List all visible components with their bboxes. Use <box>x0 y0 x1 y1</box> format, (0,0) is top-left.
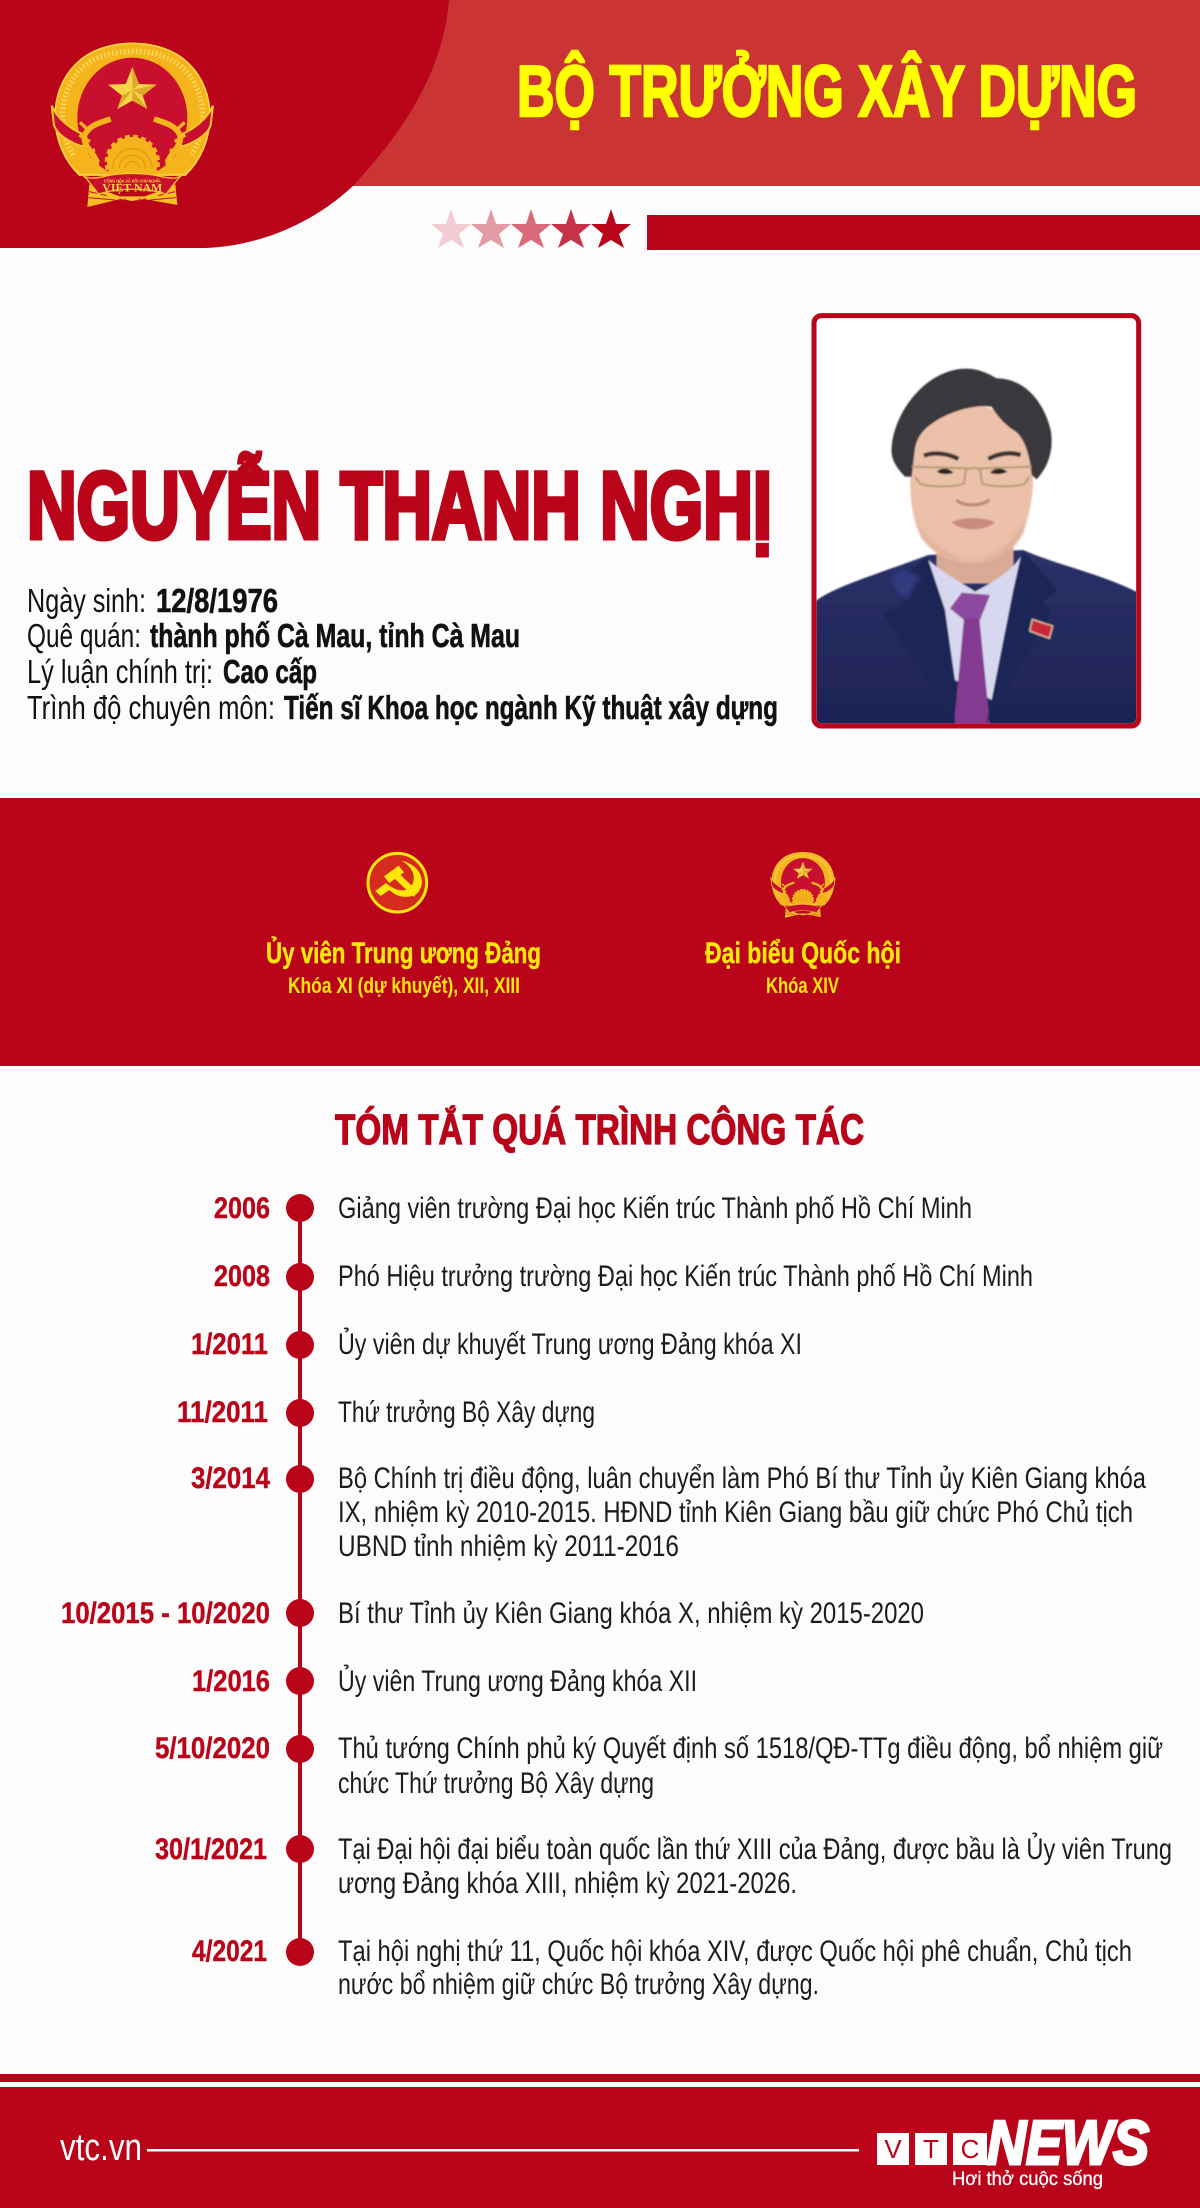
entry 10/2015 - 10/2020: Bí thư Tỉnh ủy Kiên Giang khóa X, nhiệm kỳ 2015-2020 <box>338 1597 924 1630</box>
qualification: Trình độ chuyên môn: <box>27 689 275 726</box>
icon: small national emblem <box>771 852 835 918</box>
entry 2006: 2006 <box>214 1192 270 1225</box>
VTC News logo: Hơi thở cuộc sống <box>952 2169 1103 2190</box>
political theory: Cao cấp <box>223 653 317 690</box>
entry 4/2021: nước bổ nhiệm giữ chức Bộ trưởng Xây dựng. <box>338 1968 819 2001</box>
tie <box>950 593 990 725</box>
mouth <box>952 518 995 529</box>
birth date: 12/8/1976 <box>156 582 278 619</box>
photo frame <box>814 316 1139 726</box>
entry 30/1/2021: 30/1/2021 <box>155 1833 267 1866</box>
icon: national emblem: CỘNG HÒA XÃ HỘI CHỦ NGHĨA <box>104 178 161 183</box>
birth date <box>27 582 278 619</box>
neck <box>937 543 1013 583</box>
icon: hammer and sickle <box>368 853 427 912</box>
glasses <box>912 467 1032 486</box>
red achievements panel <box>0 798 1200 1066</box>
entry 4/2021 <box>192 1935 1132 2001</box>
entry 3/2014 <box>191 1462 1146 1563</box>
party membership text <box>266 936 541 998</box>
party pin <box>1030 619 1053 638</box>
shirt <box>928 557 1021 700</box>
entry 30/1/2021 <box>155 1832 1172 1900</box>
national assembly text <box>705 937 901 998</box>
VTC News logo: V <box>884 2134 902 2164</box>
suit <box>815 550 1138 725</box>
national assembly text: Đại biểu Quốc hội <box>705 937 901 970</box>
VTC News logo <box>877 2109 1149 2190</box>
entry 2008: 2008 <box>214 1260 270 1293</box>
party membership text: Ủy viên Trung ương Đảng <box>266 936 541 970</box>
hair <box>891 369 1052 479</box>
header: title band and emblem <box>0 0 1200 248</box>
portrait photo <box>814 316 1139 726</box>
hometown <box>27 617 520 654</box>
political theory: Lý luận chính trị: <box>27 653 213 690</box>
VTC News logo: C <box>961 2134 979 2164</box>
name heading: NGUYỄN THANH NGHỊ <box>27 453 772 559</box>
eyebrows <box>924 453 1021 459</box>
website: vtc.vn <box>60 2127 142 2169</box>
national assembly text: Khóa XIV <box>766 973 839 998</box>
entry 11/2011 <box>177 1396 595 1429</box>
career timeline <box>61 1192 1172 2001</box>
footer <box>0 2074 1200 2208</box>
entry 2006: Giảng viên trường Đại học Kiến trúc Thành phố Hồ Chí Minh <box>338 1192 972 1225</box>
entry 3/2014: 3/2014 <box>191 1462 270 1495</box>
nose <box>957 499 989 505</box>
personal info text block <box>27 582 778 726</box>
entry 10/2015 - 10/2020: 10/2015 - 10/2020 <box>61 1597 270 1630</box>
birth date: Ngày sinh: <box>27 582 146 619</box>
lapels <box>883 557 955 725</box>
icon: national emblem: VIỆT NAM <box>102 182 163 195</box>
entry 3/2014: UBND tỉnh nhiệm kỳ 2011-2016 <box>338 1530 679 1563</box>
red bar beside stars <box>647 215 1200 250</box>
entry 11/2011: 11/2011 <box>177 1396 268 1429</box>
VTC News logo: NEWS <box>987 2109 1149 2178</box>
section heading: TÓM TẮT QUÁ TRÌNH CÔNG TÁC <box>335 1105 864 1154</box>
entry 5/10/2020: 5/10/2020 <box>155 1732 270 1765</box>
entry 2008: Phó Hiệu trưởng trường Đại học Kiến trúc Thành phố Hồ Chí Minh <box>338 1260 1033 1293</box>
entry 2006 <box>214 1192 972 1225</box>
eyes <box>937 469 1007 474</box>
face <box>910 404 1033 563</box>
star rating decoration <box>431 209 631 248</box>
qualification: Tiến sĩ Khoa học ngành Kỹ thuật xây dựng <box>284 689 778 726</box>
dark red curved panel <box>0 0 449 248</box>
VTC News logo: T <box>923 2134 939 2164</box>
entry 4/2021: 4/2021 <box>192 1935 267 1968</box>
entry 5/10/2020: chức Thứ trưởng Bộ Xây dựng <box>338 1767 654 1800</box>
timeline axis <box>298 1208 302 1953</box>
entry 1/2016: 1/2016 <box>192 1665 270 1698</box>
header band <box>0 0 1200 186</box>
qualification <box>27 689 778 726</box>
icon: national emblem <box>52 43 213 207</box>
entry 11/2011: Thứ trưởng Bộ Xây dựng <box>338 1396 595 1429</box>
hometown: thành phố Cà Mau, tỉnh Cà Mau <box>150 617 520 654</box>
entry 1/2011 <box>191 1327 802 1361</box>
hometown: Quê quán: <box>27 617 141 654</box>
entry 1/2016 <box>192 1664 697 1698</box>
entry 1/2011: 1/2011 <box>191 1328 268 1361</box>
entry 1/2016: Ủy viên Trung ương Đảng khóa XII <box>338 1664 697 1698</box>
entry 30/1/2021: ương Đảng khóa XIII, nhiệm kỳ 2021-2026. <box>338 1867 797 1900</box>
entry 1/2011: Ủy viên dự khuyết Trung ương Đảng khóa XI <box>338 1327 802 1361</box>
entry 10/2015 - 10/2020 <box>61 1597 924 1630</box>
party membership text: Khóa XI (dự khuyết), XII, XIII <box>288 973 520 998</box>
entry 5/10/2020 <box>155 1732 1163 1800</box>
